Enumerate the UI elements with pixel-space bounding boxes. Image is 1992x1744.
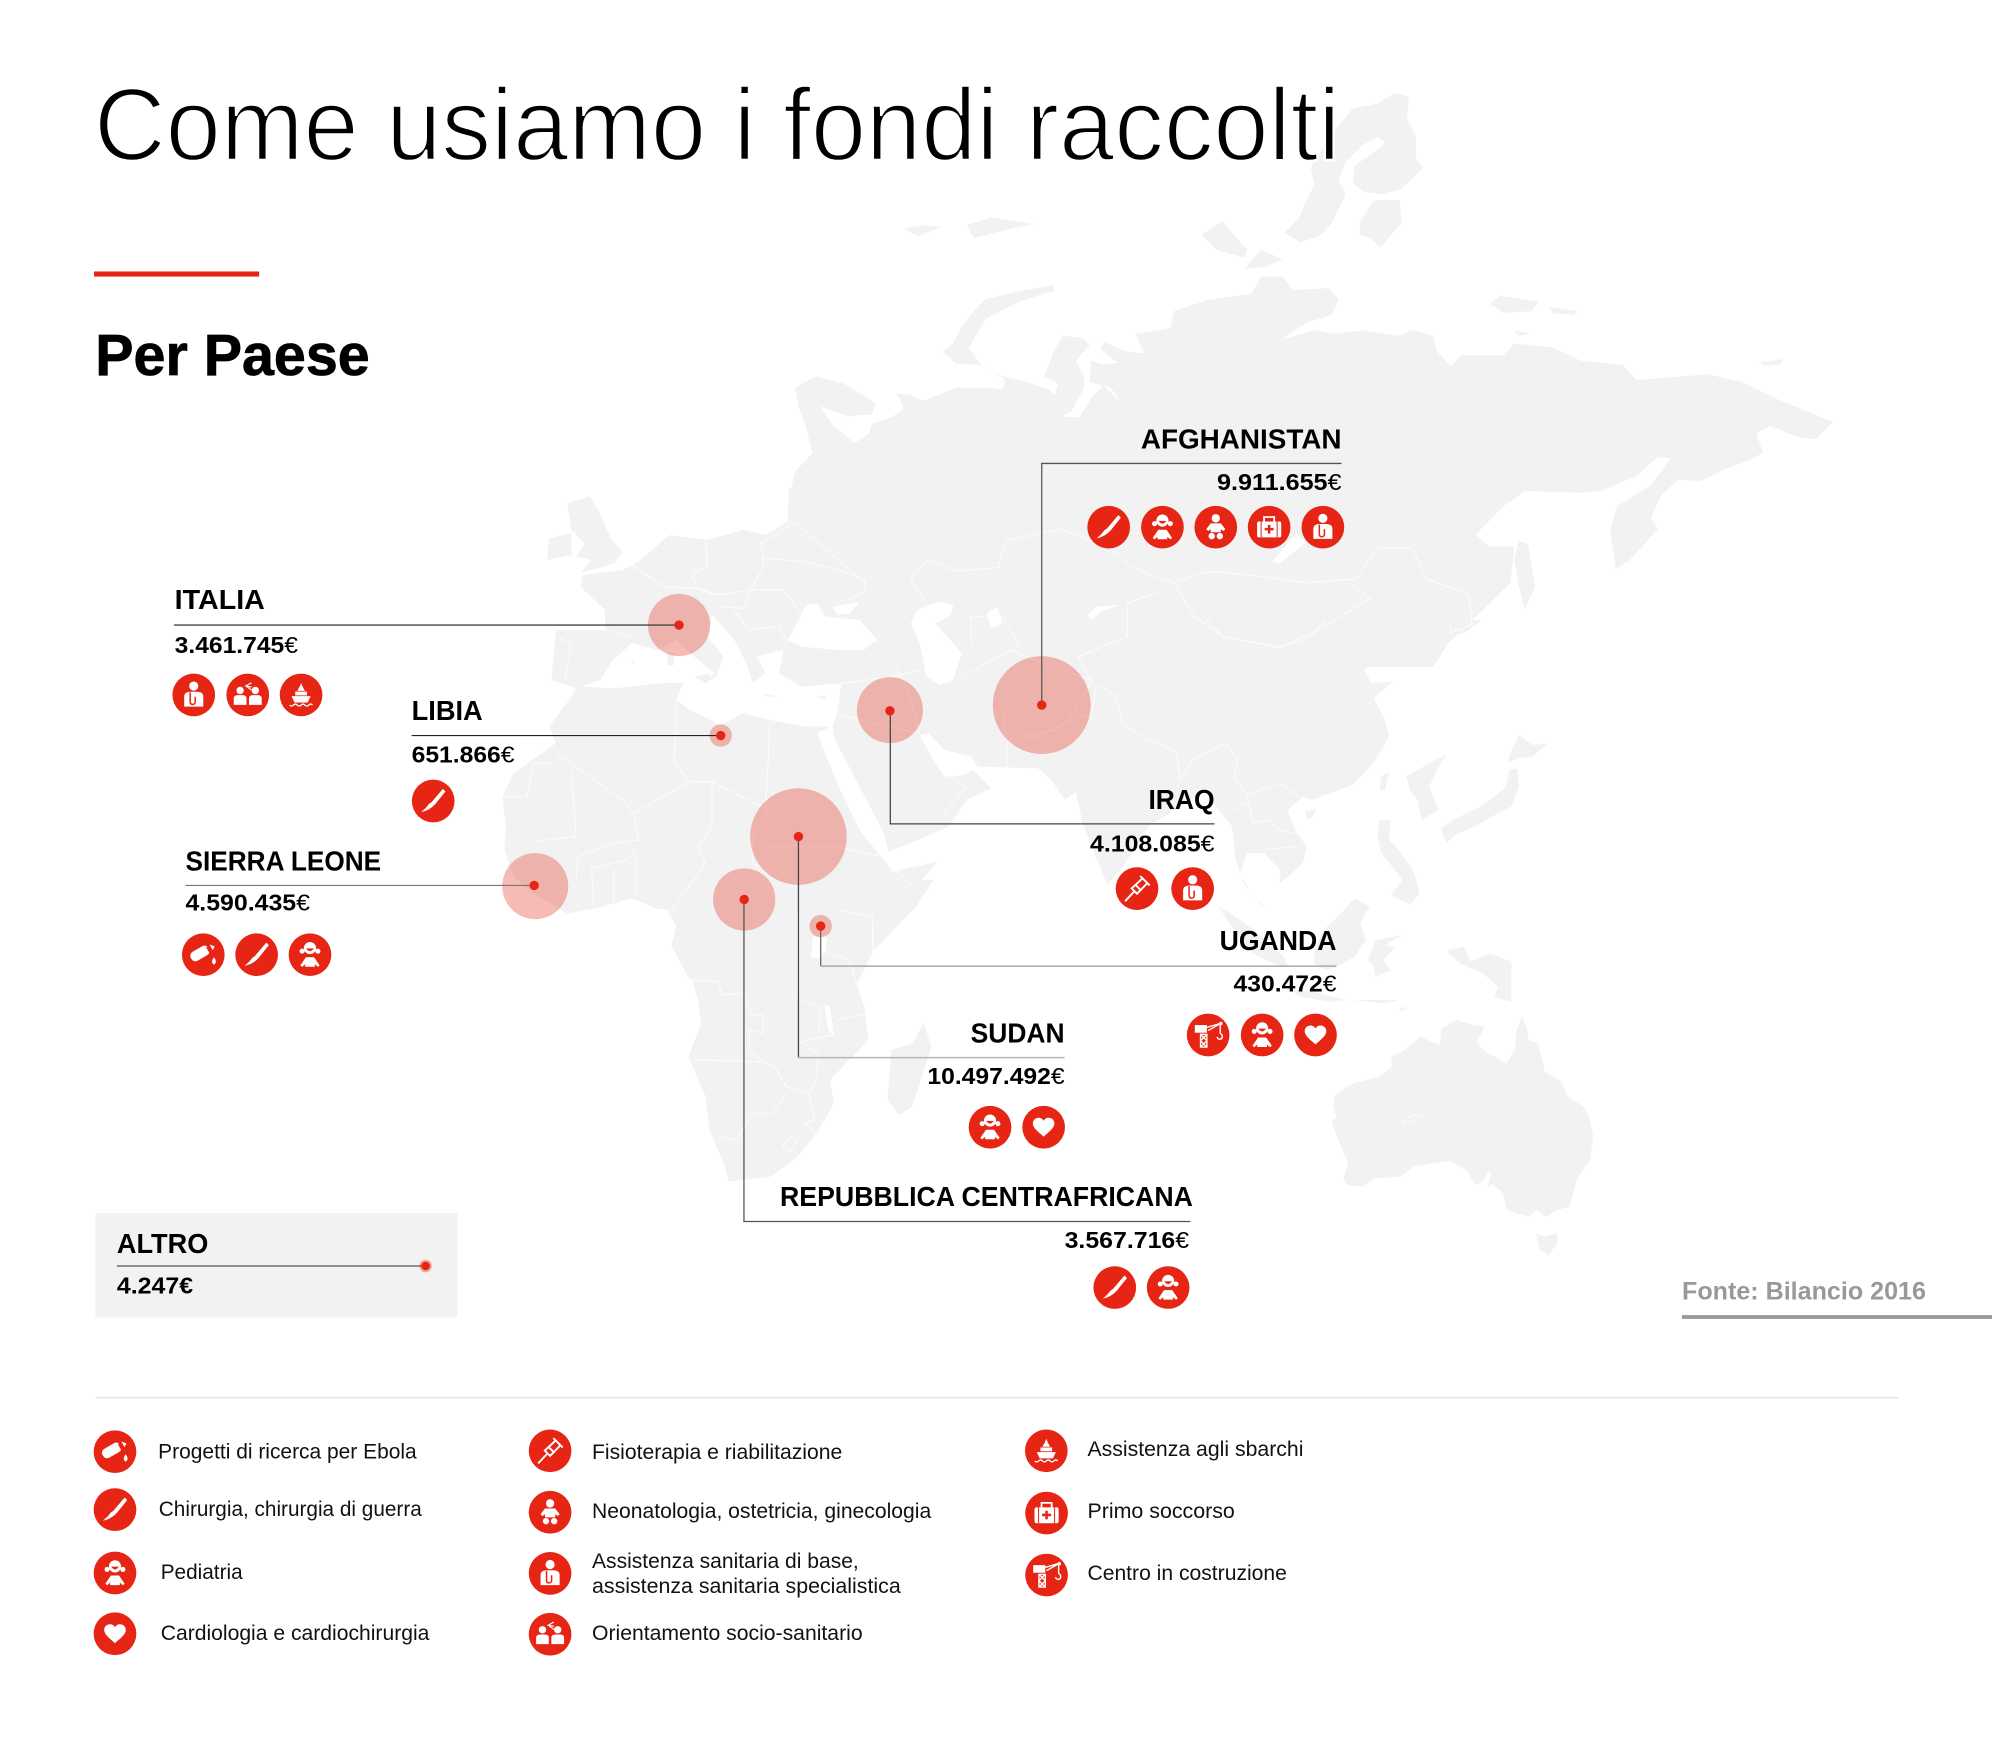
label: Libia: [412, 695, 515, 822]
legend item: Pediatria: Pediatria: [161, 1561, 243, 1584]
title accent rule: [94, 271, 259, 277]
label: Sierra Leone: SIERRA LEONE: [185, 846, 381, 877]
panel: Altro: [95, 1213, 457, 1317]
label: Sudan: 10.497.492 €: [927, 1063, 1065, 1089]
label: Uganda: UGANDA: [1220, 925, 1336, 956]
bubble and leader: Sudan: [750, 788, 1065, 1058]
source note: [1682, 1278, 1992, 1319]
legend item: Fisioterapia: [529, 1429, 842, 1472]
bubble and leader: Afghanistan: [993, 463, 1342, 754]
legend item: Orientamento: Orientamento socio-sanitario: [592, 1622, 863, 1645]
label: Libia: 651.866€: [412, 742, 515, 768]
label: Italia: 3.461.745 €: [175, 632, 298, 658]
legend item: Pediatria: [94, 1552, 243, 1594]
label: Libia: LIBIA: [412, 695, 483, 726]
label: Uganda: 430.472€: [1234, 971, 1336, 997]
legend item: Assistenza sanitaria: [529, 1550, 901, 1598]
bubble and leader: Iraq: [857, 677, 1215, 824]
panel: Altro: 4.247€: [117, 1272, 193, 1298]
legend item: Centro in costruzione: Centro in costruzione: [1087, 1562, 1287, 1585]
label: Repubblica Centrafricana: [780, 1181, 1193, 1309]
bubble and leader: Uganda: [810, 915, 1336, 966]
label: Iraq: 4.108.085 €: [1090, 831, 1215, 857]
legend item: Neonatologia: Neonatologia, ostetricia, ginecologia: [592, 1500, 931, 1523]
bubble and leader: Italia: [174, 594, 710, 656]
label: Italia: ITALIA: [175, 584, 265, 615]
legend item: Orientamento: [529, 1613, 863, 1656]
legend item: Assistenza sanitaria: assistenza sanitaria specialistica: [592, 1575, 901, 1598]
label: Sudan: SUDAN: [971, 1018, 1065, 1049]
bubble and leader: Sierra Leone: [185, 853, 568, 919]
legend item: Neonatologia: [529, 1491, 931, 1534]
legend: [94, 1429, 1303, 1656]
label: Iraq: [1090, 784, 1215, 910]
label: Sierra Leone: [182, 846, 381, 976]
panel: Altro: ALTRO: [117, 1228, 208, 1259]
label: Afghanistan: [1087, 423, 1344, 549]
label: Repubblica Centrafricana: REPUBBLICA CENTRAFRICANA: [780, 1181, 1193, 1212]
label: Afghanistan: 9.911.655 €: [1217, 469, 1342, 495]
label: Sudan: [927, 1018, 1065, 1149]
label: Uganda: [1187, 925, 1337, 1056]
label: Afghanistan: AFGHANISTAN: [1141, 423, 1342, 454]
label: Sierra Leone: 4.590.435 €: [185, 890, 310, 916]
legend item: Fisioterapia: Fisioterapia e riabilitazione: [592, 1441, 842, 1464]
legend item: Cardiologia: [94, 1612, 430, 1655]
legend item: Primo soccorso: [1025, 1492, 1235, 1534]
legend item: Cardiologia: Cardiologia e cardiochirurgia: [161, 1622, 430, 1645]
legend item: Chirurgia: [94, 1488, 422, 1531]
legend item: Ebola: Progetti di ricerca per Ebola: [158, 1440, 417, 1463]
source note: Fonte: Bilancio 2016: [1682, 1278, 1926, 1306]
legend item: Sbarchi: Assistenza agli sbarchi: [1087, 1438, 1303, 1461]
bubble and leader: Libia: [412, 724, 732, 747]
legend item: Ebola: [94, 1430, 417, 1473]
label: Italia: [172, 584, 322, 716]
world map background: [502, 93, 1833, 1256]
legend item: Assistenza sanitaria: Assistenza sanitaria di base,: [592, 1550, 859, 1573]
label: Iraq: IRAQ: [1148, 784, 1215, 815]
title: Come usiamo i fondi raccolti: [94, 67, 1340, 182]
section heading: Per Paese: Per Paese: [95, 323, 370, 388]
legend item: Primo soccorso: Primo soccorso: [1087, 1500, 1235, 1523]
legend item: Centro in costruzione: [1025, 1554, 1287, 1596]
legend item: Sbarchi: [1025, 1429, 1303, 1472]
legend item: Chirurgia: Chirurgia, chirurgia di guerra: [159, 1498, 422, 1521]
bubble and leader: Repubblica Centrafricana: [713, 868, 1190, 1221]
label: Repubblica Centrafricana: 3.567.716 €: [1065, 1227, 1189, 1253]
